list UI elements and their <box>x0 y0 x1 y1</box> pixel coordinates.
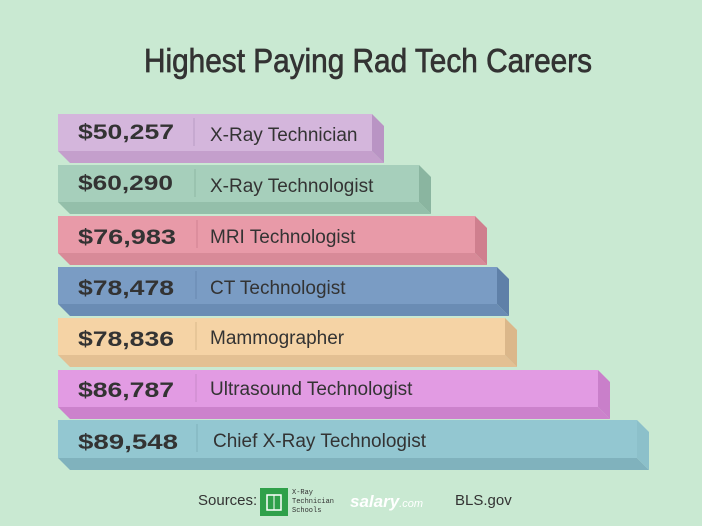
icon: xray schools logo: Schools <box>292 507 321 515</box>
sources <box>198 488 512 516</box>
bar: X-Ray Technician: X-Ray Technician <box>210 125 358 146</box>
title: Highest Paying Rad Tech Careers <box>144 42 592 79</box>
bar: Chief X-Ray Technologist: $89,548 <box>78 431 178 454</box>
bar: MRI Technologist <box>58 216 487 265</box>
sources: Sources: <box>198 492 257 509</box>
bar: Chief X-Ray Technologist: Chief X-Ray Technologist <box>213 431 427 452</box>
bar: Chief X-Ray Technologist <box>58 420 649 470</box>
bar: Mammographer: $78,836 <box>78 328 174 351</box>
icon: xray schools logo <box>260 488 334 516</box>
icon: xray schools logo: Technician <box>292 498 334 506</box>
bar: CT Technologist <box>58 267 509 316</box>
bar: CT Technologist: $78,478 <box>78 277 174 300</box>
bar: X-Ray Technician <box>58 114 384 163</box>
bar: X-Ray Technologist: $60,290 <box>78 172 173 195</box>
bar: Mammographer <box>58 318 517 367</box>
bar: Ultrasound Technologist: $86,787 <box>78 379 174 402</box>
bar: Ultrasound Technologist: Ultrasound Technologist <box>210 379 413 400</box>
bar: X-Ray Technologist <box>58 165 431 214</box>
bar: Ultrasound Technologist <box>58 370 610 419</box>
bar: MRI Technologist: $76,983 <box>78 226 176 249</box>
sources: salary.com <box>350 492 423 511</box>
bar: X-Ray Technician: $50,257 <box>78 121 174 144</box>
icon: xray schools logo: X-Ray <box>292 489 313 497</box>
bar: X-Ray Technologist: X-Ray Technologist <box>210 176 374 197</box>
bar: CT Technologist: CT Technologist <box>210 278 346 299</box>
bar: MRI Technologist: MRI Technologist <box>210 227 356 248</box>
bar: Mammographer: Mammographer <box>210 328 345 349</box>
sources: BLS.gov <box>455 492 512 509</box>
